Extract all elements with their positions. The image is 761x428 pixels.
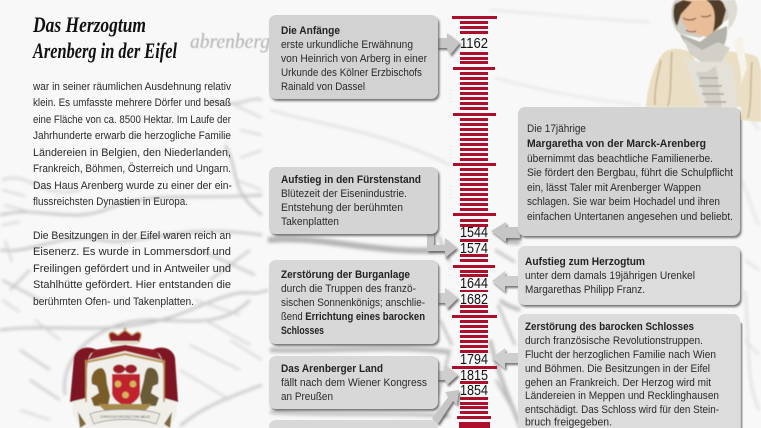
portrait: Margaretha — [646, 0, 761, 122]
panel: Margaretha von der Marck-Arenberg: Sie fördert den Bergbau, führt die Schulpflicht — [527, 167, 733, 179]
year labels: 1794 — [460, 352, 488, 368]
year labels — [460, 36, 488, 399]
title: Arenberg in der Eifel — [32, 38, 178, 63]
panel: Die Anfänge: von Heinrich von Arberg in einer — [281, 53, 427, 65]
minor ticks — [460, 21, 488, 414]
panel: Aufstieg in den Fürstenstand: Entstehung der berühmten — [281, 202, 403, 214]
text block: iron ore — [33, 230, 231, 308]
text block: iron ore: Freilingen gefördert und in Antweiler und — [33, 263, 231, 275]
text block: introduction — [32, 81, 232, 208]
panel: Aufstieg in den Fürstenstand: Takenplatten — [281, 216, 339, 228]
text block: introduction: eine Fläche von ca. 8500 Hektar. Im Laufe der — [33, 114, 231, 126]
panel: Zerstörung des barocken Schlosses: durch französische Revolutionstruppen. — [525, 335, 703, 347]
panel: Zerstörung der Burganlage — [269, 260, 458, 344]
panel: Zerstörung der Burganlage: ßend Errichtung eines barocken — [281, 311, 425, 323]
timeline ruler — [452, 16, 497, 428]
year labels: 1815 — [460, 368, 488, 384]
text block: iron ore: berühmten Ofen- und Takenplatten. — [33, 296, 194, 308]
panel: Margaretha von der Marck-Arenberg: schlagen. Sie war beim Hochadel und ihren — [527, 196, 720, 208]
panel: Aufstieg zum Herzogtum — [492, 246, 740, 305]
title — [32, 12, 178, 63]
panel: Aufstieg in den Fürstenstand: Aufstieg in den Fürstenstand — [281, 174, 421, 186]
panel: Zerstörung des barocken Schlosses — [492, 314, 742, 428]
panel: Zerstörung der Burganlage: durch die Truppen des franzö- — [281, 283, 416, 295]
panel: Zerstörung des barocken Schlosses: und Böhmen. Die Besitzungen in der Eifel — [525, 363, 710, 375]
panel: Aufstieg zum Herzogtum: Aufstieg zum Herzogtum — [525, 256, 645, 268]
panel: Die Anfänge: erste urkundliche Erwähnung — [281, 39, 413, 51]
panel: Margaretha von der Marck-Arenberg: einfachen Untertanen angesehen und beliebt. — [527, 211, 733, 223]
panel: Die Anfänge: Rainald von Dassel — [281, 81, 365, 93]
text block: introduction: flussreichsten Dynastien in Europa. — [33, 196, 188, 208]
year labels: 1574 — [460, 241, 488, 257]
text block: introduction: Frankreich, Böhmen, Österreich und Ungarn. — [33, 163, 231, 175]
panel: Aufstieg zum Herzogtum: Margarethas Philipp Franz. — [525, 284, 645, 296]
year labels: 1644 — [460, 276, 488, 292]
text block: iron ore: Stahlhütte gefördert. Hier entstanden die — [33, 279, 231, 291]
panel: Die Anfänge: Urkunde des Kölner Erzbischofs — [281, 67, 422, 79]
text block: introduction: klein. Es umfasste mehrere Dörfer und besaß — [33, 97, 231, 109]
panel: Margaretha von der Marck-Arenberg — [491, 107, 740, 242]
background: faded historic map: abrenberg — [190, 29, 270, 53]
panel: Zerstörung der Burganlage: Zerstörung der Burganlage — [281, 269, 410, 281]
panel: Das Arenberger Land — [269, 356, 458, 409]
text block: introduction: Jahrhunderte erwarb die herzogliche Familie — [33, 130, 231, 142]
panel: Zerstörung des barocken Schlosses: entschädigt. Das Schloss wird für den Stein- — [525, 404, 719, 416]
icon: coat of arms: CHRISTUS PROTECTOR MEUS — [100, 414, 150, 419]
year labels: 1682 — [460, 292, 488, 308]
text block: iron ore: Die Besitzungen in der Eifel waren reich an — [33, 230, 231, 242]
panel: Margaretha von der Marck-Arenberg: ein, lässt Taler mit Arenberger Wappen — [527, 182, 701, 194]
panel: Zerstörung der Burganlage: Schlosses — [281, 325, 324, 337]
panel: Zerstörung des barocken Schlosses: Flucht der herzoglichen Familie nach Wien — [525, 349, 716, 361]
panel: Zerstörung des barocken Schlosses: Zerstörung des barocken Schlosses — [525, 321, 694, 333]
text block: introduction: Ländereien in Belgien, den Niederlanden, — [33, 147, 231, 159]
year labels: 1854 — [460, 383, 488, 399]
icon: coat of arms — [70, 327, 178, 428]
panel: Margaretha von der Marck-Arenberg: Die 17jährige — [527, 123, 586, 135]
panel: cropped bottom card — [269, 390, 459, 428]
panel: Die Anfänge: Die Anfänge — [281, 25, 340, 37]
major ticks — [452, 16, 497, 419]
panel: Margaretha von der Marck-Arenberg: übernimmt das beachtliche Familienerbe. — [527, 153, 713, 165]
panel: Das Arenberger Land: fällt nach dem Wiener Kongress — [281, 377, 427, 389]
text block: introduction: war in seiner räumlichen Ausdehnung relativ — [32, 81, 232, 93]
panel: Das Arenberger Land: an Preußen — [281, 391, 333, 403]
panel: Aufstieg in den Fürstenstand — [269, 167, 457, 258]
panel: Margaretha von der Marck-Arenberg: Margaretha von der Marck-Arenberg — [527, 138, 706, 150]
panel: Das Arenberger Land: Das Arenberger Land — [281, 363, 383, 375]
panel: Die Anfänge — [269, 15, 460, 99]
panel: Aufstieg zum Herzogtum: unter dem damals 19jährigen Urenkel — [525, 270, 695, 282]
text block: introduction: Das Haus Arenberg wurde zu einer der ein- — [33, 180, 232, 192]
year labels: 1162 — [460, 36, 488, 52]
panel: Zerstörung des barocken Schlosses: Ländereien in Meppen und Recklinghausen — [525, 390, 719, 402]
title: Das Herzogtum — [32, 12, 146, 37]
text block: iron ore: Eisenerz. Es wurde in Lommersdorf und — [33, 246, 231, 258]
panel: Aufstieg in den Fürstenstand: Blütezeit der Eisenindustrie. — [281, 188, 407, 200]
panel: Zerstörung des barocken Schlosses: gehen an Frankreich. Der Herzog wird mit — [525, 377, 711, 389]
panel: Zerstörung der Burganlage: sischen Sonnenkönigs; anschlie- — [281, 297, 425, 309]
year labels: 1544 — [460, 225, 488, 241]
